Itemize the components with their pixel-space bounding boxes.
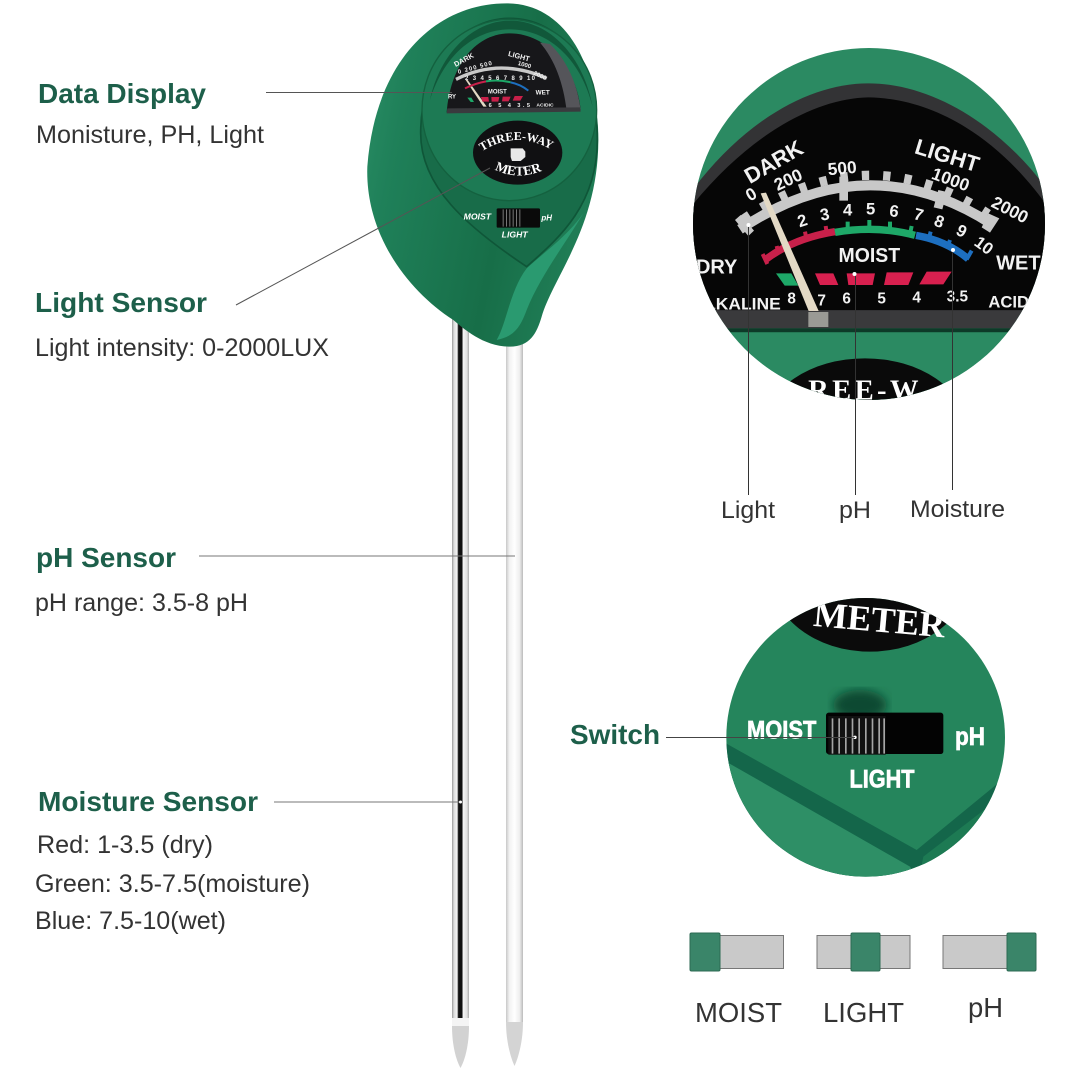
dial text: 6 5 4 3.5 [489,103,530,109]
selector switch [464,208,552,239]
dial text: MOIST [488,89,507,95]
meter name oval: METER [494,162,542,176]
dial readout labels: pH [839,497,871,524]
lower right panel [922,809,986,865]
dial scale text: 5 [866,200,875,219]
dial scale text: 8 [932,211,947,232]
magnified dial circle [693,48,1045,400]
dial readout labels: Moisture [910,496,1005,523]
body shell [367,3,598,347]
dial scale text: 10 [971,232,997,259]
callout: Data Display: Data Display [38,78,207,109]
dial text: WET [536,89,550,96]
switch labels: MOIST [747,717,816,744]
pH blocks [776,272,952,286]
callout: Moisture Sensor: Red: 1-3.5 (dry) [37,831,213,859]
dial scale text: MOIST [838,244,901,267]
dial scale text: ACIDIC [988,292,1046,311]
inner face panel [421,18,597,267]
probe: left metal rod [452,318,469,1068]
dial scale text: DARK [740,135,807,189]
callout: pH Sensor: pH Sensor [36,542,176,573]
dial scale text: 6 [888,201,900,221]
switch position: LIGHT [817,933,910,1028]
dial scale text: 2000 [988,192,1032,227]
dial text: 2000 [532,71,548,82]
dial text: DARK [452,51,476,69]
dial text: 0 200 500 [457,61,493,76]
magnified switch circle [726,598,1005,877]
dial scale text: 0 [742,183,760,205]
dial scale text: 4 [912,290,921,307]
probe: right metal rod [506,330,523,1066]
callout: Moisture Sensor [35,786,462,935]
dial window [447,33,581,113]
meter name oval [473,120,562,185]
dial readout labels: Light [721,497,775,524]
callout: Data Display: Monisture, PH, Light [36,121,264,149]
switch position: pH [943,933,1036,1023]
dial scale text: 1000 [929,163,972,195]
meter body [367,3,598,347]
name oval fragment [790,358,943,400]
fold highlight [497,213,583,340]
dial scale text: 8 [787,290,796,307]
callout: pH Sensor: pH range: 3.5-8 pH [35,589,248,617]
dial text: LIGHT [507,49,531,64]
callout: Light Sensor: Light Sensor [35,287,207,318]
dial scale text: 500 [827,157,857,179]
callout: pH Sensor [35,542,515,617]
black dial face [687,97,1053,310]
callout: Data Display [36,78,452,149]
upper dark rim [430,21,593,107]
dark rim [687,83,1053,313]
base strip [716,311,1022,400]
dial text: 1000 [517,61,532,70]
dial scale text: 4 [843,201,853,220]
grey scale arc [735,175,999,236]
selector switch: LIGHT [502,229,528,239]
switch labels [748,720,984,788]
callout: Light Sensor: Light intensity: 0-2000LUX [35,334,329,362]
name oval fragment: METER [812,594,948,645]
callout: Moisture Sensor: Moisture Sensor [38,786,258,817]
slot shadow [833,690,887,720]
dial scale text: DRY [696,257,737,279]
switch slot [826,713,943,755]
dial readout labels [721,496,1005,524]
name oval fragment: REE-W [808,374,922,406]
switch position: pH: pH [968,992,1003,1023]
selector switch: pH [540,213,552,222]
dial scale text: LIGHT [912,134,983,177]
dial text [448,49,554,109]
callout: Light Sensor [35,168,490,362]
switch position: MOIST [690,933,784,1028]
dial scale text: 6 [842,290,851,307]
callout: Moisture Sensor: Blue: 7.5-10(wet) [35,907,226,935]
green housing [693,48,1045,400]
dial scale text: ALKALINE [692,294,781,313]
switch labels: pH [955,724,985,751]
readout dots [746,223,955,276]
selector switch: MOIST [464,212,492,222]
green housing [726,598,1005,877]
needle [761,193,819,311]
dial scale text: 9 [953,221,970,242]
dial scale text: 2 [795,210,810,231]
lower diagonal panel [726,744,997,877]
dial text: RY [448,95,456,101]
needle [466,80,487,107]
dial scale text: 3.5 [947,289,968,306]
switch labels: LIGHT [849,766,914,793]
switch position: LIGHT: LIGHT [823,997,904,1028]
dial scale text: 7 [817,292,826,309]
leader lines: dial readouts [748,225,952,495]
callout: Switch: Switch [570,719,660,750]
dial scale text: 5 [877,290,886,307]
dial scale arc [456,68,547,79]
callout: Moisture Sensor: Green: 3.5-7.5(moisture) [35,870,310,898]
lower fold [728,763,912,877]
dial scale text: 7 [912,204,925,225]
colour blocks [481,96,523,102]
dial scale text: 200 [771,164,805,195]
dial scale text: 3 [818,204,831,225]
meter name oval: THREE-WAY [478,132,554,150]
dial text: ACIDIC [536,103,554,109]
dial text: 2 3 4 5 6 7 8 9 10 [465,76,536,82]
front disc [422,19,597,201]
colour arcs [465,81,486,88]
dial scale text: WET [996,252,1041,274]
dial scale text [692,134,1046,313]
moisture colour arcs [763,220,972,264]
switch position: MOIST: MOIST [695,997,782,1028]
